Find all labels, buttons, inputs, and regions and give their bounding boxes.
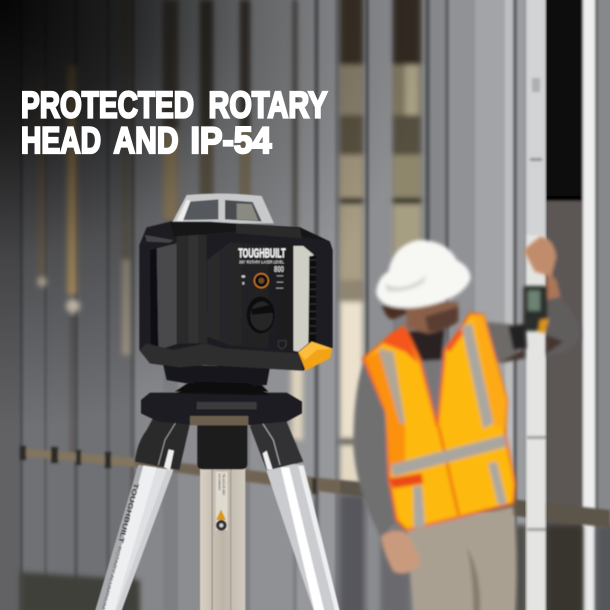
title line 2: IP-54	[190, 120, 272, 161]
trousers	[407, 507, 516, 610]
hand at side	[381, 530, 421, 574]
bottom bevel	[139, 343, 303, 371]
right leg	[263, 462, 341, 610]
lower wall and floor	[20, 572, 140, 610]
tripod head plate	[141, 393, 302, 425]
mount base under unit	[163, 365, 270, 387]
warning triangle	[216, 509, 226, 520]
housing body	[139, 222, 333, 371]
center mast: TB-H2-LR-360	[222, 473, 226, 495]
model line: 360° ROTARY LASER LEVEL	[239, 259, 284, 265]
safety vest	[363, 313, 515, 530]
center mast	[200, 467, 245, 610]
right leg bracket	[250, 408, 303, 471]
title line 2: AND	[114, 120, 178, 161]
left leg	[94, 465, 173, 610]
protected rotary head cage	[172, 194, 274, 223]
title line 2: HEAD	[21, 120, 101, 161]
head mount	[175, 382, 268, 392]
title line 2	[21, 120, 272, 161]
brand logo: TOUGHBUILT	[238, 246, 286, 260]
left leg bracket	[135, 408, 190, 470]
vest reflective shoulder stripes	[462, 323, 493, 428]
tripod	[94, 382, 341, 610]
rotary laser unit	[139, 194, 333, 395]
torso undershirt and collar	[403, 330, 450, 427]
surveyor staff	[526, 0, 546, 610]
background: horizontal rail	[20, 446, 610, 528]
selector dial	[247, 297, 275, 333]
leg small text: ROTARY ALUMINUM	[101, 546, 123, 610]
forearm beyond staff	[547, 295, 581, 357]
worker wearing hard hat and safety vest	[353, 237, 581, 610]
raised upper arm	[483, 322, 517, 363]
front control panel	[207, 243, 293, 351]
hand on staff	[523, 237, 557, 277]
orange bumper	[298, 342, 332, 371]
mast label	[216, 472, 228, 530]
power button	[254, 274, 268, 288]
title	[21, 84, 328, 161]
hard hat	[376, 240, 471, 308]
vest reflective waist band	[390, 435, 507, 477]
shield mark	[278, 341, 286, 349]
laser symbol	[216, 520, 227, 531]
handle opening	[293, 246, 314, 352]
left arm sleeve	[353, 360, 398, 537]
top bevel	[170, 222, 330, 242]
vest lower stripes	[413, 485, 425, 528]
wrist	[547, 270, 561, 300]
center mast: A071990004	[218, 473, 222, 491]
status indicators	[242, 275, 245, 278]
face and beard	[407, 302, 458, 333]
range number: 800	[274, 264, 284, 274]
receiver on staff	[523, 286, 547, 331]
title line 1: PROTECTED	[21, 84, 194, 126]
black collar	[197, 425, 247, 469]
handle grip ribs	[309, 256, 316, 343]
title line 1: ROTARY	[208, 84, 328, 126]
leg brand text: TOUGHBUILT	[116, 482, 139, 544]
left side panel	[157, 243, 178, 350]
